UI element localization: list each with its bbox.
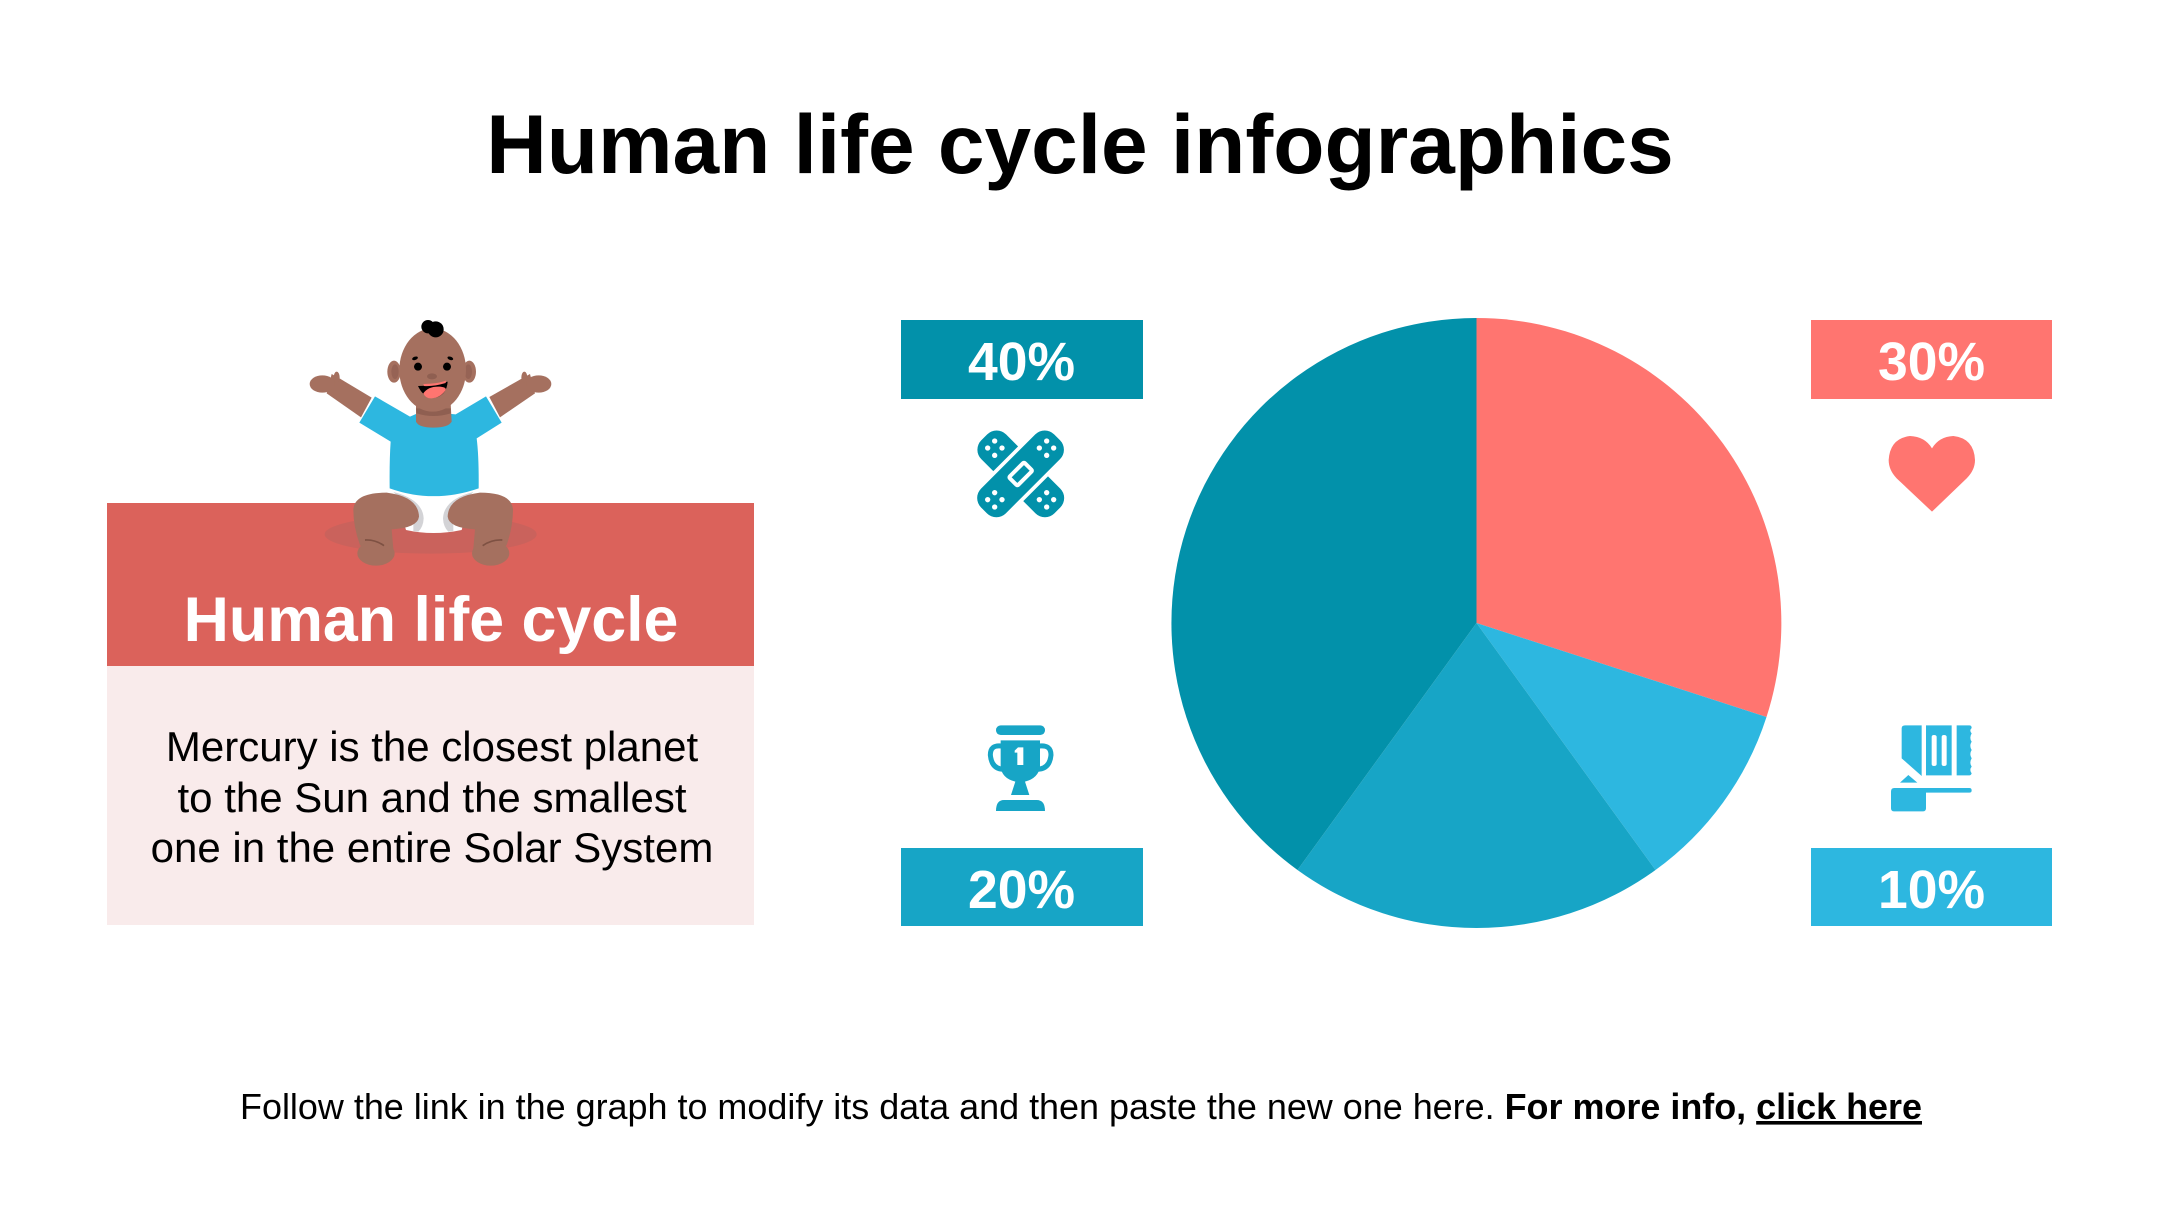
panel header background (107, 503, 754, 666)
label: 30%: 30% (1878, 333, 1985, 392)
panel description: to the Sun and the smallest (178, 774, 687, 821)
icon: bandage (972, 425, 1070, 523)
illustration: sitting baby (310, 320, 551, 566)
title: Human life cycle infographics (486, 97, 1674, 191)
icon: book and ticket (1891, 725, 1972, 811)
panel: human life cycle (107, 503, 754, 925)
label: 10%: 10% (1878, 861, 1985, 920)
slice: 40% dark teal (1171, 318, 1476, 870)
label: 40%: 40% (968, 333, 1075, 392)
panel description: one in the entire Solar System (151, 824, 713, 871)
slice: 20% mid blue (1298, 623, 1656, 928)
label: 10% (1811, 848, 2052, 926)
slice: 30% coral (1476, 318, 1781, 717)
panel body background (107, 666, 754, 925)
slice: 10% light blue (1476, 623, 1766, 870)
pie chart (1171, 318, 1781, 928)
icon: heart (1889, 436, 1975, 512)
label: 20%: 20% (968, 861, 1075, 920)
panel heading: Human life cycle (184, 585, 678, 655)
label: 30% (1811, 320, 2052, 399)
label: 20% (901, 848, 1143, 926)
icon: trophy (990, 725, 1051, 811)
footer note: Follow the link in the graph to modify its data and then paste the new one here. For more info, click here (240, 1086, 1922, 1127)
panel description: Mercury is the closest planet (166, 723, 698, 770)
label: 40% (901, 320, 1143, 399)
